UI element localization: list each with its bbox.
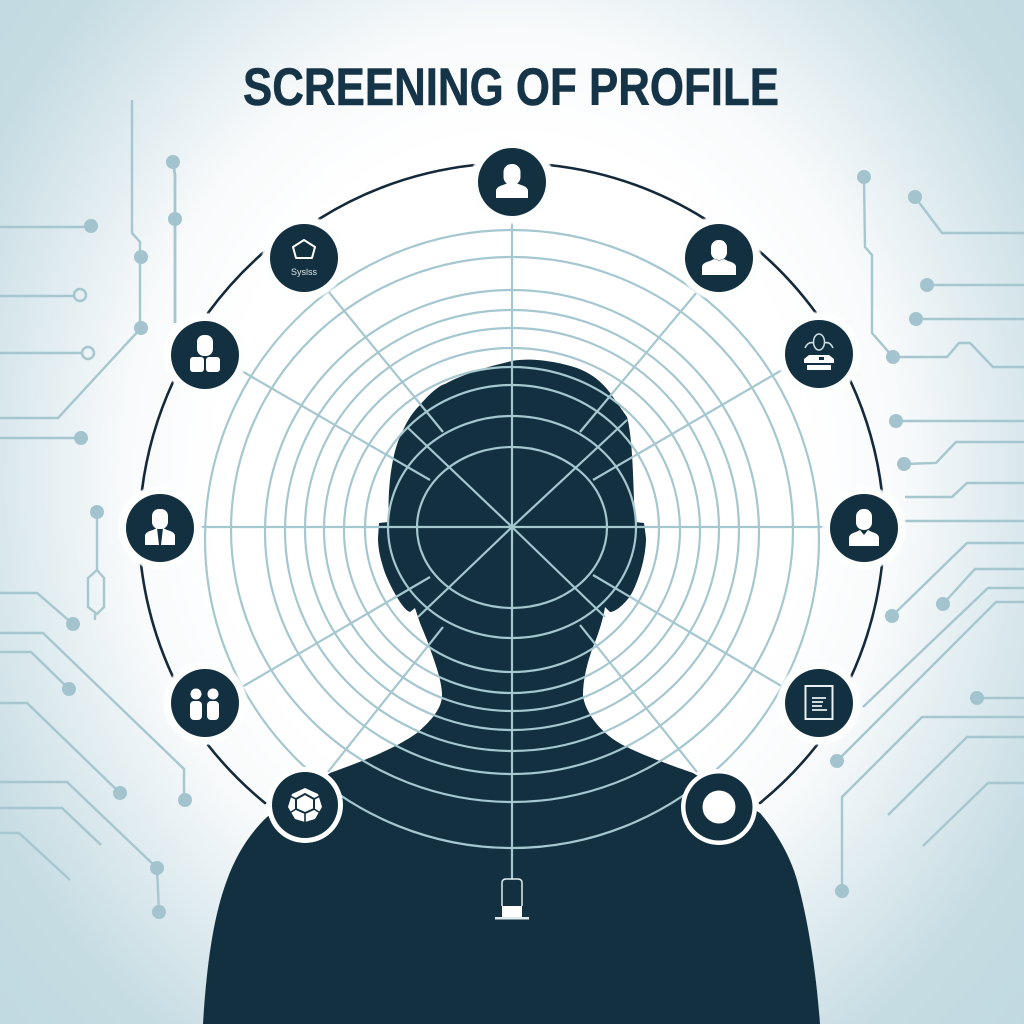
icon: gem on shoulder <box>267 767 343 843</box>
icon: right person with collar <box>830 494 898 562</box>
icon: two pills <box>171 669 239 737</box>
circuit lines: left side <box>0 100 192 919</box>
icon: small tube marker <box>495 879 529 920</box>
icon: ring on shoulder <box>681 769 757 845</box>
icon: pentagon with label <box>270 224 338 292</box>
icon: presenter at desk <box>785 320 853 388</box>
icon: pentagon with label: Syslss <box>291 267 317 277</box>
icon: two-block person <box>171 321 239 389</box>
icon: upper right person <box>685 224 753 292</box>
circuit lines: right side <box>830 170 1024 898</box>
icon halos <box>117 139 907 746</box>
outer orbit arcs <box>141 165 882 803</box>
title: SCREENING OF PROFILE <box>243 58 779 117</box>
icon: top person <box>478 148 546 216</box>
icon: left business person <box>126 494 194 562</box>
icon: document <box>785 669 853 737</box>
radar rings and spokes <box>200 222 825 879</box>
person silhouette <box>203 360 820 1024</box>
